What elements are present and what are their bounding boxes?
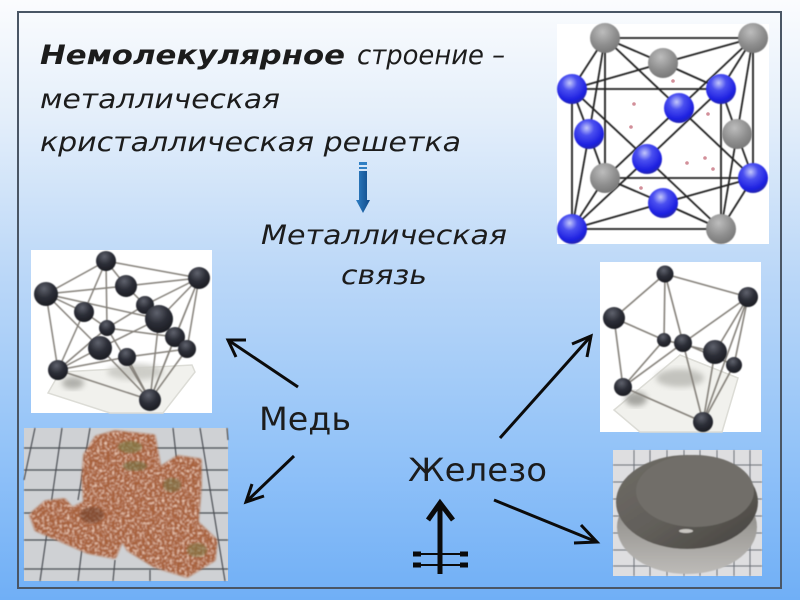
iron crystal lattice model: [600, 262, 761, 432]
copper crystal lattice model: [31, 250, 212, 413]
arrow: iron to sample: [494, 500, 597, 543]
label: metallic bond: Металлическая: [261, 220, 507, 251]
photo: copper nugget: [24, 428, 228, 581]
symbol: triple bond up arrow: [413, 503, 468, 574]
title: [40, 40, 505, 158]
arrow: title to metallic bond: [356, 162, 370, 213]
title: строение –: [357, 40, 505, 71]
crystal lattice: blue and gray atoms: [557, 23, 769, 244]
label: copper: Медь: [259, 400, 351, 438]
photo: iron disc: [613, 450, 762, 576]
label: iron: Железо: [408, 451, 547, 489]
arrow: iron to lattice: [500, 336, 591, 438]
title: металлическая: [40, 84, 280, 115]
arrow: copper to lattice: [228, 340, 298, 387]
title: кристаллическая решетка: [40, 127, 461, 158]
arrow: copper to sample: [246, 456, 294, 502]
label: metallic bond: связь: [341, 260, 427, 291]
title: Немолекулярное: [40, 40, 345, 71]
label: metallic bond: [261, 220, 507, 291]
